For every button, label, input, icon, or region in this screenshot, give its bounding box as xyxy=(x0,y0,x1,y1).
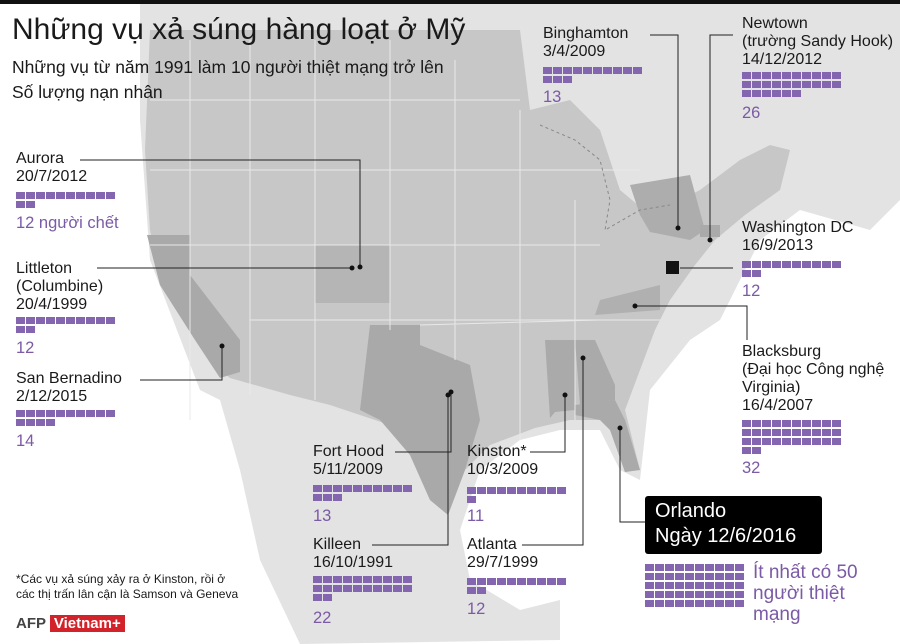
label: Newtown: 26 xyxy=(742,104,760,122)
label: San Bernadino xyxy=(16,370,122,450)
label: Atlanta: 29/7/1999 xyxy=(467,554,538,571)
label: San Bernadino: 14 xyxy=(16,432,34,450)
label: Kinston: Kinston* xyxy=(467,443,527,460)
label: Killeen: Killeen xyxy=(313,536,361,553)
label: Washington DC xyxy=(742,219,853,300)
label: Fort Hood: Fort Hood xyxy=(313,443,384,460)
label: Blacksburg: (Đại học Công nghệ xyxy=(742,361,884,378)
label: San Bernadino: San Bernadino xyxy=(16,370,122,387)
label: Aurora: 12 người chết xyxy=(16,214,119,232)
label: Washington DC: 16/9/2013 xyxy=(742,237,813,254)
label: Binghamton xyxy=(543,25,642,106)
label: Blacksburg: 32 xyxy=(742,459,760,477)
highlighted states xyxy=(147,235,240,378)
label: Littleton: 20/4/1999 xyxy=(16,296,87,313)
usa xyxy=(145,30,790,515)
label: Binghamton: 13 xyxy=(543,88,561,106)
label: Littleton: Littleton xyxy=(16,260,72,277)
label: Washington DC: 12 xyxy=(742,282,760,300)
callout: Orlando: Orlando xyxy=(655,500,726,522)
title: Những vụ xả súng hàng loạt ở Mỹ xyxy=(12,13,465,46)
label: San Bernadino: 2/12/2015 xyxy=(16,388,87,405)
label: Aurora: Aurora xyxy=(16,150,64,167)
label: Fort Hood: 5/11/2009 xyxy=(313,461,383,478)
label: Killeen xyxy=(313,536,412,627)
callout: Orlando: Ít nhất có 50 xyxy=(753,562,858,583)
label: Washington DC: Washington DC xyxy=(742,219,853,236)
subtitle xyxy=(12,57,444,102)
label: Atlanta xyxy=(467,536,566,618)
callout: Orlando xyxy=(645,496,858,625)
label: Aurora xyxy=(16,150,119,232)
label: Killeen: 16/10/1991 xyxy=(313,554,393,571)
callout: Orlando: mạng xyxy=(753,604,801,625)
label: Binghamton: Binghamton xyxy=(543,25,628,42)
logos: AFP Vietnam+ xyxy=(16,615,121,632)
label: Killeen: 22 xyxy=(313,609,331,627)
label: Fort Hood xyxy=(313,443,412,525)
callout: Orlando: người thiệt xyxy=(753,583,845,604)
label: Newtown: Newtown xyxy=(742,15,808,32)
label: Atlanta: 12 xyxy=(467,600,485,618)
top bar xyxy=(0,0,900,4)
footnote xyxy=(16,572,238,601)
leader lines xyxy=(80,35,747,545)
label: Newtown: (trường Sandy Hook) xyxy=(742,33,893,50)
footnote: *Các vụ xả súng xảy ra ở Kinston, rồi ở xyxy=(16,572,225,586)
label: Binghamton: 3/4/2009 xyxy=(543,43,605,60)
label: Newtown xyxy=(742,15,893,122)
subtitle: Những vụ từ năm 1991 làm 10 người thiệt mạng trở lên xyxy=(12,57,444,77)
label: Kinston: 11 xyxy=(467,507,484,525)
footnote: các thị trấn lân cận là Samson và Geneva xyxy=(16,587,238,601)
label: Blacksburg xyxy=(742,343,884,477)
label: Blacksburg: 16/4/2007 xyxy=(742,397,813,414)
label: Aurora: 20/7/2012 xyxy=(16,168,87,185)
label: Fort Hood: 13 xyxy=(313,507,331,525)
label: Kinston: 10/3/2009 xyxy=(467,461,538,478)
subtitle: Số lượng nạn nhân xyxy=(12,82,163,102)
label: Littleton: (Columbine) xyxy=(16,278,103,295)
label: Littleton xyxy=(16,260,115,357)
label: Kinston xyxy=(467,443,566,525)
label: Littleton: 12 xyxy=(16,339,34,357)
label: Atlanta: Atlanta xyxy=(467,536,517,553)
label: Blacksburg: Blacksburg xyxy=(742,343,821,360)
callout: Orlando: Ngày 12/6/2016 xyxy=(655,525,796,547)
label: Blacksburg: Virginia) xyxy=(742,379,800,396)
label: Newtown: 14/12/2012 xyxy=(742,51,822,68)
